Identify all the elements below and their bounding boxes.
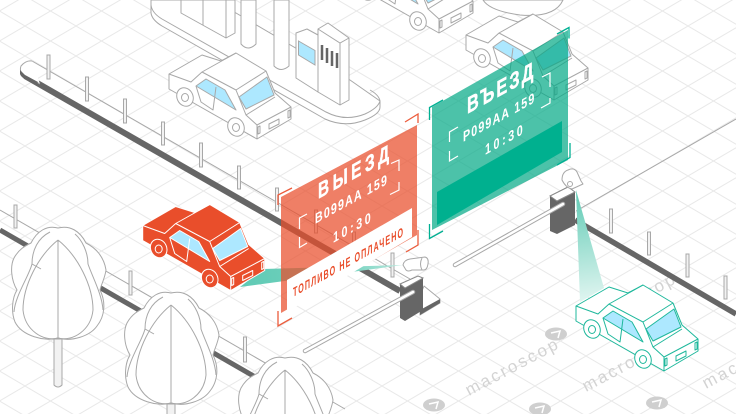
watermarks: macroscop xyxy=(423,270,736,414)
second gas station island, top right xyxy=(483,0,563,15)
barrier: exit xyxy=(305,276,440,351)
car: top right, grey xyxy=(466,14,588,100)
road with fence: right xyxy=(575,119,736,314)
barrier post xyxy=(550,187,575,234)
heading: ВЪЕЗД xyxy=(467,57,536,119)
barrier base xyxy=(420,286,440,315)
car: red, exit xyxy=(143,204,265,290)
heading: ВЫЕЗД xyxy=(318,139,393,205)
sign: entry xyxy=(430,28,570,238)
time: 10:30 xyxy=(485,120,525,158)
camera: exit xyxy=(403,257,428,271)
car: top left, grey xyxy=(351,0,473,33)
sign corners xyxy=(430,28,570,238)
column right xyxy=(274,0,289,70)
tree 1 xyxy=(12,227,106,387)
plate number: Р099АА 159 xyxy=(463,89,535,145)
camera: entry xyxy=(562,169,583,189)
column left xyxy=(241,0,256,48)
alert text: ТОПЛИВО НЕ ОПЛАЧЕНО xyxy=(293,225,404,301)
fuel pump xyxy=(296,23,349,105)
time: 10:30 xyxy=(333,208,373,246)
sign: exit xyxy=(278,114,418,326)
road with fence: lower left xyxy=(0,205,345,409)
watermarks: macroscop: macroscop xyxy=(462,335,561,400)
plate brackets xyxy=(300,160,399,248)
dark band xyxy=(437,121,562,225)
car: teal, entry xyxy=(576,285,698,371)
watermarks: macroscop: macroscop xyxy=(579,270,678,335)
sign corners xyxy=(278,114,418,326)
watermarks: macroscop: macroscop xyxy=(579,331,678,396)
plate brackets xyxy=(450,73,550,161)
camera beam: entry xyxy=(576,190,604,302)
road with fence: upper left xyxy=(20,55,410,291)
alert band xyxy=(287,208,412,312)
plate number: В099АА 159 xyxy=(315,171,388,227)
camera beam: exit xyxy=(240,265,403,287)
barrier arm xyxy=(455,204,563,265)
tree 3 xyxy=(239,357,333,414)
trees xyxy=(12,227,333,414)
gas station island xyxy=(151,0,380,124)
barrier post xyxy=(400,276,423,321)
tree 2 xyxy=(125,292,219,414)
barrier arm xyxy=(305,292,413,351)
barrier: entry xyxy=(455,187,575,265)
car: at pump, grey xyxy=(169,53,291,139)
pump block behind xyxy=(181,0,235,38)
